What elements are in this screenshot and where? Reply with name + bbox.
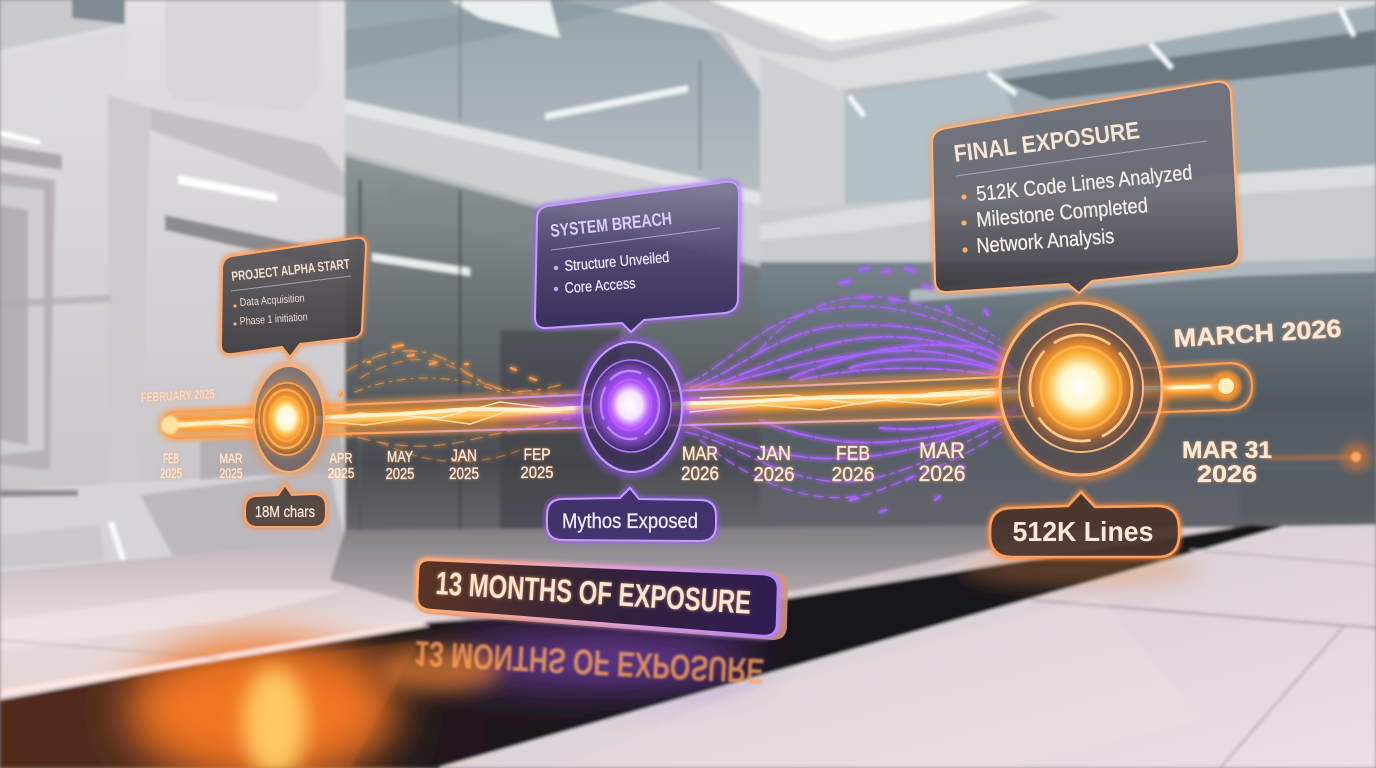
timeline date labels: APR (330, 450, 353, 467)
pill: 18M chars: 18M chars (255, 504, 315, 521)
callout: final exposure (932, 82, 1239, 293)
banner: 13 months of exposure: 13 MONTHS OF EXPOSURE (435, 565, 752, 621)
timeline date labels: JAN (451, 446, 477, 465)
timeline date labels: 2025 (160, 465, 182, 481)
timeline date labels: 2025 (520, 463, 554, 482)
timeline date labels: 2025 (449, 464, 479, 483)
pill: 18M chars (245, 485, 326, 527)
orange particle streams (340, 345, 580, 462)
timeline date labels: 2025 (386, 466, 415, 483)
callout: system breach (535, 182, 739, 332)
purple particle streams (685, 268, 1015, 512)
timeline tube (163, 363, 1252, 438)
list: final items: Milestone Completed (975, 194, 1149, 232)
banner: 13 months of exposure (415, 557, 788, 640)
list: breach items: Structure Unveiled (564, 249, 670, 275)
timeline date labels: FEB (836, 443, 870, 465)
timeline date labels: JAN (757, 443, 791, 465)
timeline date labels: FEBRUARY 2025 (140, 386, 215, 405)
node 1: project alpha start (251, 364, 327, 474)
left wall (0, 0, 345, 575)
timeline date labels: 2026 (681, 464, 719, 485)
timeline date labels: 2025 (220, 465, 243, 481)
timeline date labels: 2025 (328, 465, 354, 482)
timeline date labels (140, 315, 1342, 488)
list: breach items (554, 249, 670, 297)
timeline date labels: 2026 (1197, 461, 1257, 488)
list: alpha items: Phase 1 initiation (239, 311, 308, 328)
node 3: final exposure (161, 301, 1241, 477)
timeline date labels: MAY (387, 449, 413, 466)
pill: 512K lines (990, 492, 1179, 557)
timeline date labels: MAR 31 (1182, 437, 1272, 464)
timeline date labels: MAR (919, 438, 965, 463)
list: final items (961, 161, 1193, 258)
timeline date labels: MARCH 2026 (1173, 315, 1342, 353)
right of central column (700, 0, 1376, 90)
timeline date labels: FEB (163, 450, 179, 466)
node 2: system breach (580, 340, 684, 474)
list: final items: Network Analysis (976, 225, 1115, 258)
floor (0, 525, 1376, 768)
heading: project alpha start: PROJECT ALPHA START (231, 256, 351, 284)
pill: 512K lines: 512K Lines (1012, 516, 1154, 547)
timeline date labels: 2026 (832, 464, 874, 486)
energy beam (172, 386, 1226, 428)
timeline date labels: FEP (524, 445, 550, 464)
list: alpha items (233, 292, 308, 328)
timeline date labels: MAR (682, 444, 718, 465)
list: alpha items: Data Acquisition (239, 292, 305, 309)
list: final items: 512K Code Lines Analyzed (975, 161, 1193, 206)
callout: project alpha start (221, 238, 366, 357)
timeline date labels: 2026 (754, 464, 794, 486)
list: breach items: Core Access (564, 275, 636, 297)
floor reflection of banner: 13 MONTHS OF EXPOSURE (413, 632, 765, 690)
pill: mythos exposed (547, 488, 716, 541)
heading: system breach: SYSTEM BREACH (549, 208, 673, 241)
heading: final exposure: FINAL EXPOSURE (952, 117, 1141, 168)
timeline date labels: 2026 (918, 461, 966, 486)
distant glow light (1270, 443, 1370, 471)
timeline date labels: MAR (220, 450, 242, 466)
pill: mythos exposed: Mythos Exposed (562, 510, 698, 533)
